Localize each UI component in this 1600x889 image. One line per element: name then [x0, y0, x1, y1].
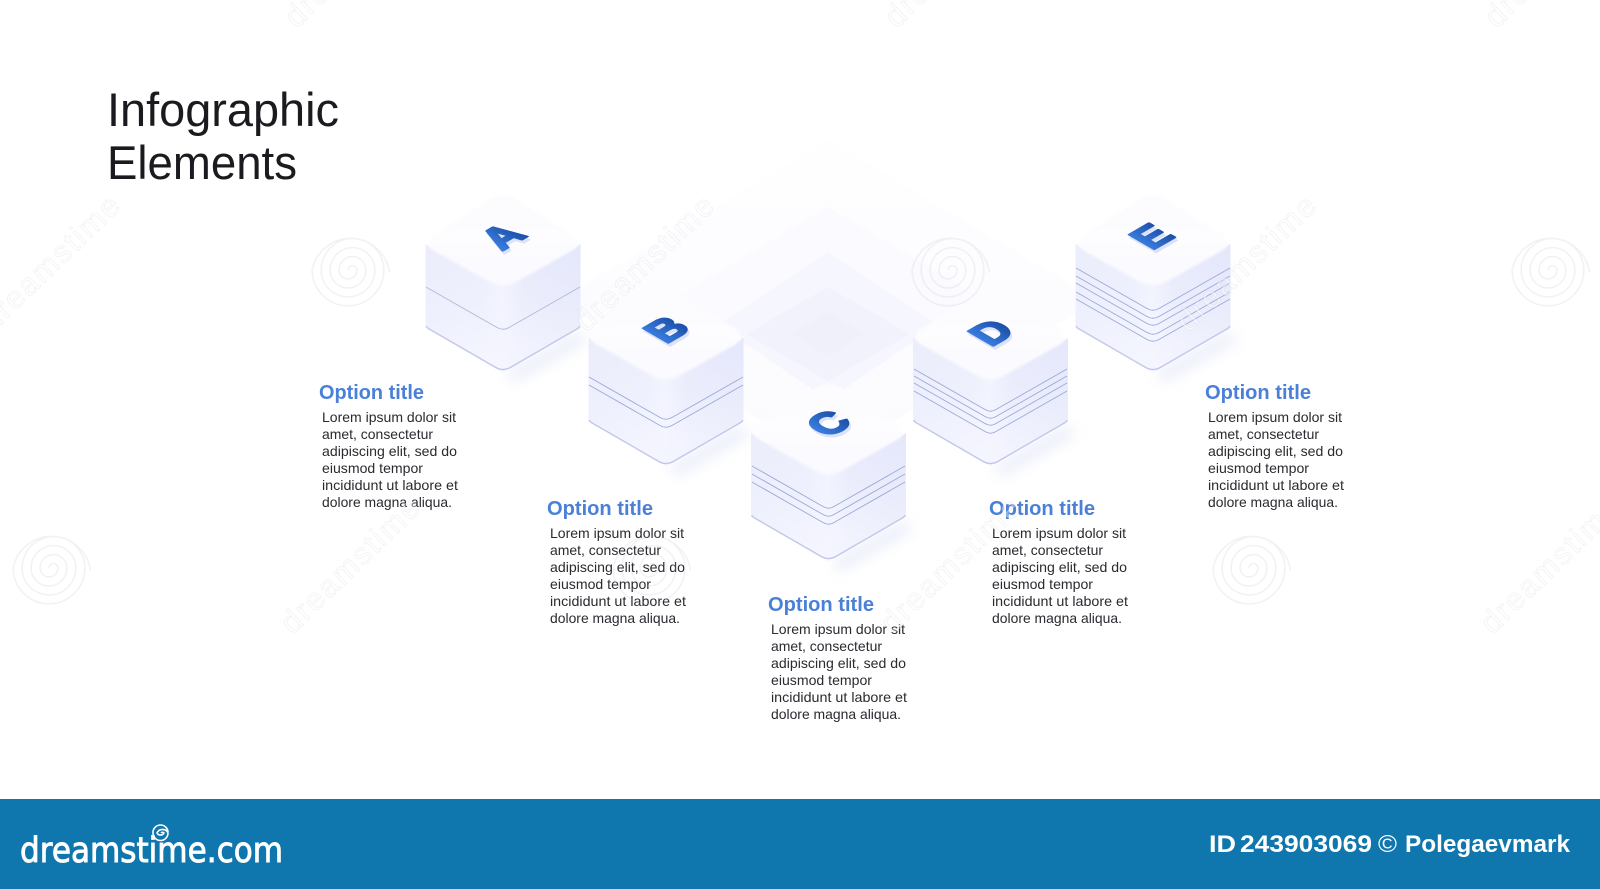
text block D: eiusmod tempor — [992, 577, 1093, 592]
text block B: amet, consectetur — [550, 543, 661, 558]
image id and author: Polegaevmark — [1405, 831, 1570, 858]
letter C: C — [795, 404, 862, 443]
cube D — [913, 289, 1076, 476]
text block A: incididunt ut labore et — [322, 478, 458, 493]
text block C: Option title — [768, 593, 874, 616]
text block E — [1205, 381, 1344, 510]
text block B: dolore magna aliqua. — [550, 611, 680, 626]
text block D: incididunt ut labore et — [992, 594, 1128, 609]
watermark: dreamstime — [273, 489, 428, 640]
image id and author: © — [1378, 831, 1397, 858]
letter B: B — [635, 313, 702, 352]
text block B: Lorem ipsum dolor sit — [550, 526, 684, 541]
title: Elements — [107, 136, 297, 189]
text block E: Option title — [1205, 381, 1311, 404]
text block B — [547, 497, 686, 626]
title: Infographic — [107, 83, 339, 136]
letter B: B — [633, 310, 700, 349]
text block E: adipiscing elit, sed do — [1208, 444, 1343, 459]
letter D: D — [960, 316, 1027, 355]
title — [107, 83, 339, 189]
watermark — [0, 0, 1600, 640]
logo text: dreamstime.com — [20, 831, 283, 871]
text block D — [989, 497, 1128, 626]
text block B: Option title — [547, 497, 653, 520]
text block C: amet, consectetur — [771, 639, 882, 654]
watermark: dreamstime — [567, 187, 722, 338]
text block C: dolore magna aliqua. — [771, 707, 901, 722]
logo icon — [153, 825, 168, 841]
watermark: dreamstime — [873, 489, 1028, 640]
cube A — [426, 195, 588, 382]
text block A: eiusmod tempor — [322, 461, 423, 476]
text block C: adipiscing elit, sed do — [771, 656, 906, 671]
text block E: amet, consectetur — [1208, 427, 1319, 442]
text block D: Option title — [989, 497, 1095, 520]
cube B — [588, 289, 751, 476]
central isometric layered diamonds — [558, 140, 1098, 460]
text block E: Lorem ipsum dolor sit — [1208, 410, 1342, 425]
cube E — [1076, 195, 1238, 382]
text block C — [768, 593, 907, 722]
text block E: incididunt ut labore et — [1208, 478, 1344, 493]
text block D: adipiscing elit, sed do — [992, 560, 1127, 575]
text block B: incididunt ut labore et — [550, 594, 686, 609]
footer bar — [0, 799, 1600, 889]
letter A: A — [469, 217, 536, 256]
letter E: E — [1121, 220, 1186, 258]
text block A: amet, consectetur — [322, 427, 433, 442]
letter A: A — [471, 220, 538, 259]
text block B: eiusmod tempor — [550, 577, 651, 592]
text block D: Lorem ipsum dolor sit — [992, 526, 1126, 541]
text block C: eiusmod tempor — [771, 673, 872, 688]
letter C: C — [797, 407, 864, 446]
watermark: dreamstime — [1169, 187, 1324, 338]
text block A: dolore magna aliqua. — [322, 495, 452, 510]
text block B: adipiscing elit, sed do — [550, 560, 685, 575]
image id and author: ID — [1209, 831, 1236, 858]
text block D: amet, consectetur — [992, 543, 1103, 558]
text block A: adipiscing elit, sed do — [322, 444, 457, 459]
letter E: E — [1119, 217, 1184, 255]
text block C: incididunt ut labore et — [771, 690, 907, 705]
image id and author: 243903069 — [1240, 831, 1372, 858]
text block E: eiusmod tempor — [1208, 461, 1309, 476]
text block A: Option title — [319, 381, 424, 404]
text block C: Lorem ipsum dolor sit — [771, 622, 905, 637]
text block A — [319, 381, 458, 510]
text block A: Lorem ipsum dolor sit — [322, 410, 456, 425]
text block E: dolore magna aliqua. — [1208, 495, 1338, 510]
cube C — [751, 384, 914, 571]
text block D: dolore magna aliqua. — [992, 611, 1122, 626]
letter D: D — [958, 313, 1025, 352]
image id and author — [1209, 831, 1570, 858]
